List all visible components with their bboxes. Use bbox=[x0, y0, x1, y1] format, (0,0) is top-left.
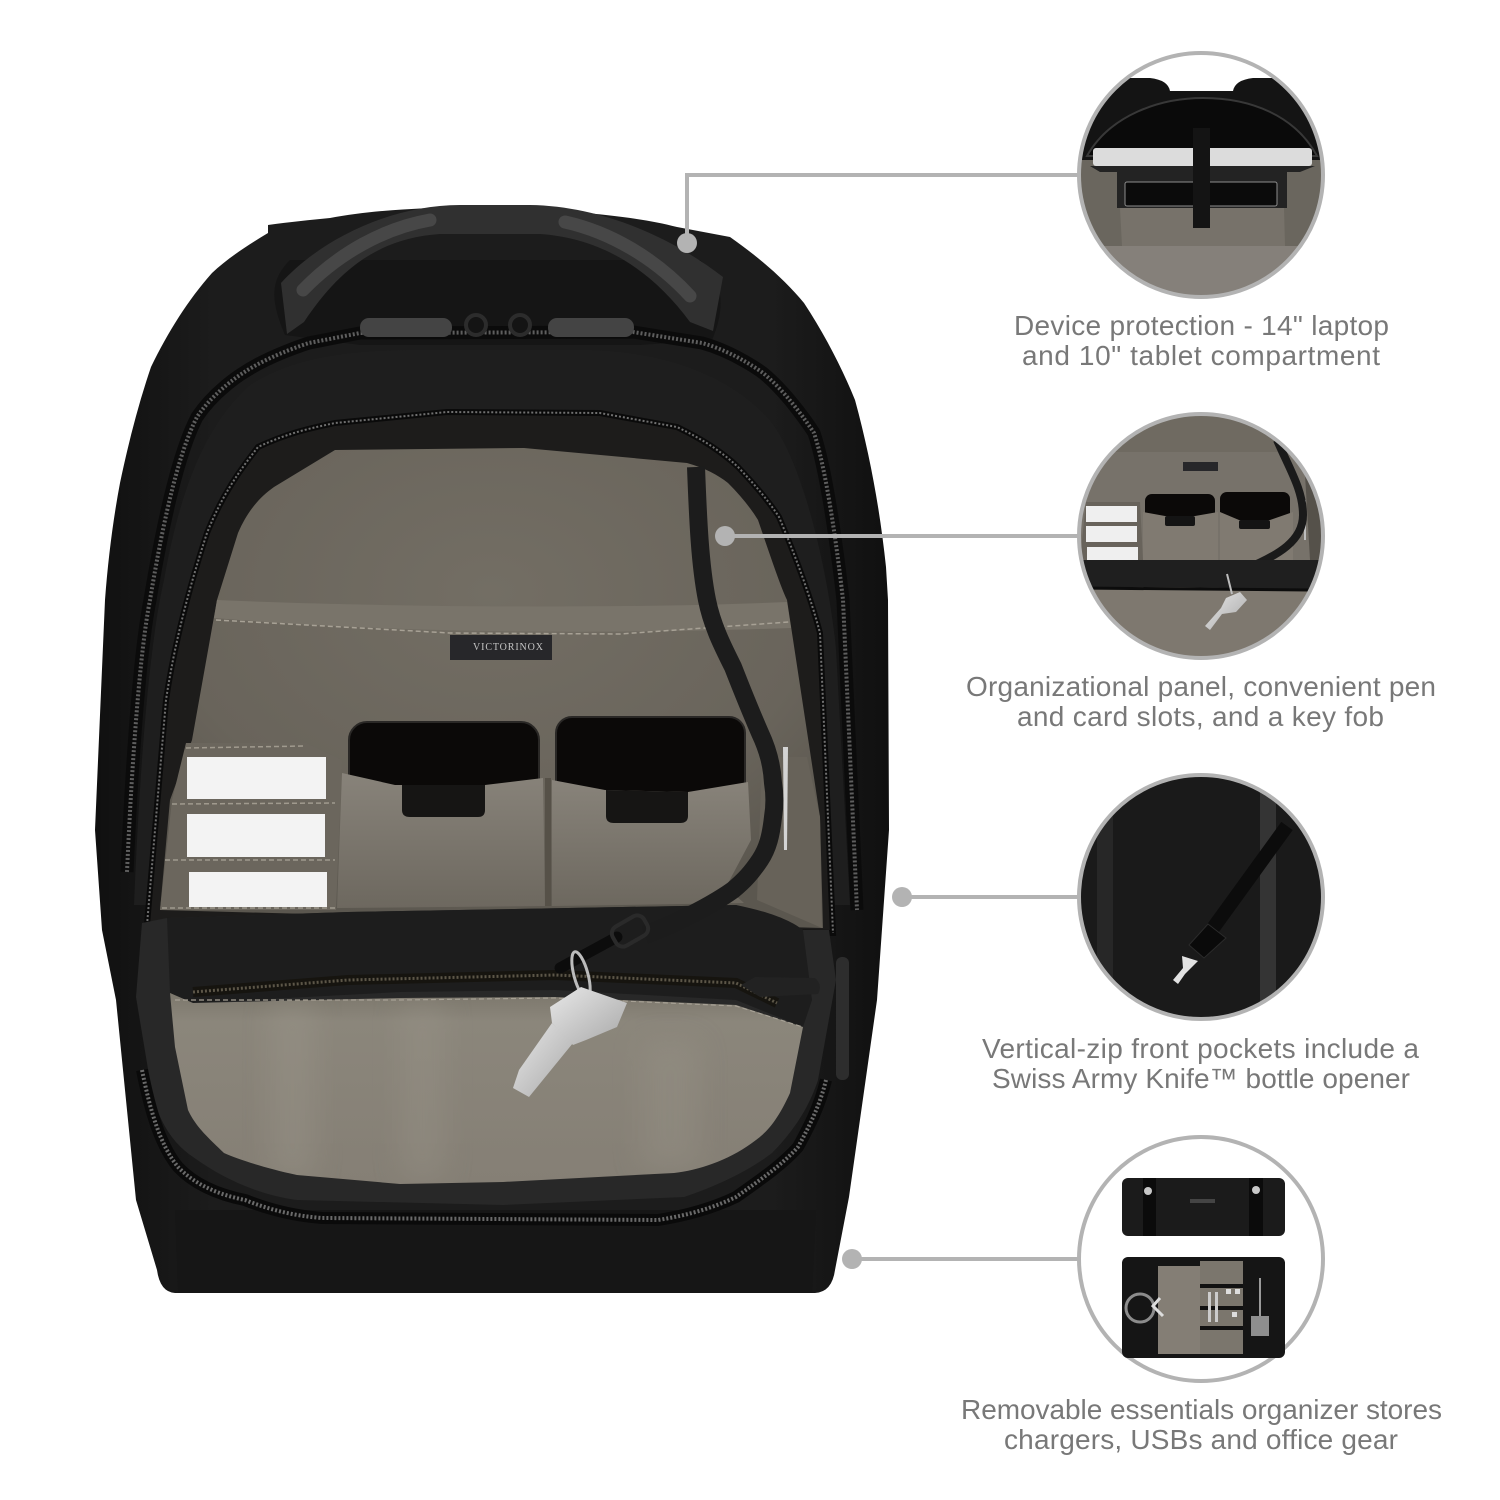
brand label: VICTORINOX bbox=[473, 642, 544, 653]
detail circle: laptop compartment bbox=[1075, 50, 1330, 301]
top handle bbox=[281, 205, 723, 334]
rolled organizer bbox=[1122, 1178, 1285, 1236]
lining folds bbox=[270, 1000, 700, 1180]
key and ring bbox=[513, 950, 627, 1097]
caption: essentials organizer: chargers, USBs and office gear bbox=[1004, 1424, 1398, 1455]
inner zipper and binding bbox=[147, 412, 833, 933]
open organizer bbox=[1122, 1257, 1285, 1358]
right phone pocket bbox=[552, 780, 751, 906]
caption: vertical-zip front pockets: Swiss Army Knife™ bottle opener bbox=[992, 1063, 1410, 1094]
front pocket zipper bbox=[175, 975, 803, 1027]
connector: laptop compartment bbox=[677, 175, 1080, 253]
top shoulder panel bbox=[274, 260, 721, 345]
front pocket upper mesh bbox=[167, 905, 812, 1027]
caption: device protection: Device protection - 14" laptop bbox=[1014, 310, 1389, 341]
outer zipper track bbox=[127, 332, 857, 910]
detail circle: front pocket bottle opener bbox=[1075, 770, 1327, 1022]
right pocket tab bbox=[606, 790, 688, 823]
left pocket tab bbox=[402, 785, 485, 817]
caption: organizational panel: and card slots, and a key fob bbox=[1017, 701, 1384, 732]
organizer fold bbox=[214, 600, 791, 634]
lower front pocket rim bbox=[136, 905, 836, 1205]
bottom band bbox=[175, 1210, 816, 1293]
card panel bbox=[160, 743, 342, 910]
caption: device protection: and 10" tablet compartment bbox=[1022, 340, 1380, 371]
pocket seam bbox=[545, 778, 551, 906]
white cards bbox=[187, 757, 327, 907]
caption: vertical-zip front pockets bbox=[982, 1033, 1419, 1094]
front pocket lining bbox=[170, 993, 803, 1184]
pen pocket bbox=[757, 757, 822, 928]
brand label bbox=[450, 635, 552, 660]
detail circle: organizational panel bbox=[1075, 410, 1330, 665]
caption: essentials organizer bbox=[961, 1394, 1442, 1455]
caption: organizational panel bbox=[966, 671, 1436, 732]
caption: vertical-zip front pockets: Vertical-zip front pockets include a bbox=[982, 1033, 1419, 1064]
detail circle: essentials organizer bbox=[1079, 1137, 1323, 1381]
caption: organizational panel: Organizational panel, convenient pen bbox=[966, 671, 1436, 702]
pen bbox=[783, 747, 788, 850]
caption: device protection bbox=[1014, 310, 1389, 371]
connector: essentials organizer bbox=[842, 1249, 1080, 1269]
connector: front pockets bbox=[892, 887, 1080, 907]
backpack illustration bbox=[95, 205, 889, 1293]
zipper puller bbox=[741, 977, 820, 997]
taupe interior lining bbox=[160, 448, 823, 928]
front panel band bbox=[134, 350, 850, 905]
left phone bbox=[349, 722, 539, 796]
right phone bbox=[556, 717, 745, 797]
carabiner bbox=[560, 912, 651, 968]
connector: organizational panel bbox=[715, 526, 1080, 546]
lower zipper track bbox=[142, 1070, 826, 1220]
organizer strap bbox=[645, 467, 774, 935]
backpack body bbox=[95, 207, 889, 1293]
side puller bbox=[836, 957, 849, 1080]
zipper pulls bbox=[360, 315, 634, 337]
left phone pocket bbox=[337, 773, 545, 908]
caption: essentials organizer: Removable essentials organizer stores bbox=[961, 1394, 1442, 1425]
